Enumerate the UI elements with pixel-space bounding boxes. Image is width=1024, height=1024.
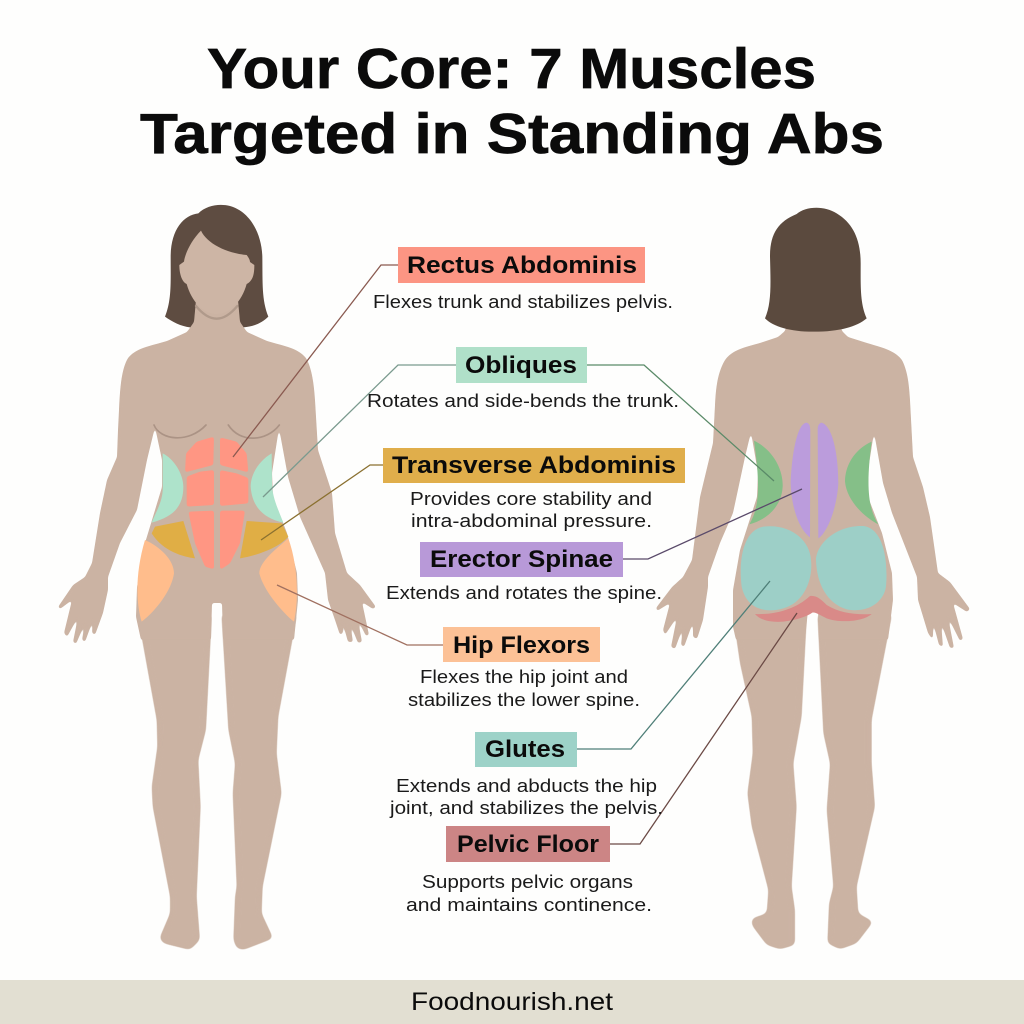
- face: [179, 231, 254, 314]
- hair: front: [165, 205, 268, 327]
- hair: back: [765, 208, 867, 332]
- label: pelvic floor: and maintains continence.: [406, 894, 652, 915]
- label: glutes: [389, 732, 663, 818]
- label: pelvic floor: Pelvic Floor: [457, 831, 599, 858]
- muscle: erector spinae: [791, 423, 838, 538]
- label: rectus abdominis: Rectus Abdominis: [407, 252, 637, 279]
- leader line: transverse abdominis: [261, 465, 383, 540]
- leader line: obliques right: [587, 365, 774, 481]
- title: [140, 37, 884, 166]
- footer: [0, 980, 1024, 1024]
- muscle: transverse abdominis: [152, 521, 288, 558]
- leader line: hip flexors: [277, 585, 443, 645]
- neck shadow: [196, 306, 237, 319]
- leader line: glutes: [577, 581, 770, 749]
- back body figure: [656, 208, 970, 949]
- title: Your Core: 7 Muscles: [207, 37, 816, 101]
- label: glutes: Glutes: [485, 736, 565, 763]
- label: transverse abdominis: Provides core stability and: [410, 488, 652, 509]
- label: erector spinae: [386, 542, 662, 603]
- skin: front legs: [137, 613, 297, 950]
- leader line: erector spinae: [623, 489, 802, 559]
- skin: front torso and arms: [58, 300, 376, 644]
- front body figure: [58, 205, 376, 950]
- label: transverse abdominis: [383, 448, 685, 531]
- leader line: pelvic floor: [610, 613, 797, 844]
- label: rectus abdominis: [373, 247, 673, 312]
- label: glutes: Extends and abducts the hip: [396, 775, 657, 796]
- muscle: obliques back: [749, 441, 878, 524]
- muscle: pelvic floor: [755, 596, 872, 622]
- muscle: obliques front: [152, 453, 283, 523]
- label: obliques: Rotates and side-bends the trunk.: [367, 390, 679, 411]
- label: glutes: joint, and stabilizes the pelvis.: [389, 797, 663, 818]
- label: hip flexors: Hip Flexors: [453, 632, 590, 659]
- muscle: hip flexors: [137, 538, 297, 622]
- label: obliques: [367, 347, 679, 411]
- label: hip flexors: [408, 627, 640, 710]
- label: pelvic floor: Supports pelvic organs: [422, 871, 633, 892]
- skin: back legs: [733, 613, 892, 949]
- leader line: obliques left: [263, 365, 456, 497]
- label: transverse abdominis: Transverse Abdominis: [392, 452, 676, 479]
- label: rectus abdominis: Flexes trunk and stabilizes pelvis.: [373, 291, 673, 312]
- muscle: rectus abdominis: [185, 437, 248, 570]
- title: Targeted in Standing Abs: [140, 102, 884, 166]
- leader line: rectus abdominis: [233, 265, 398, 457]
- label: erector spinae: Extends and rotates the spine.: [386, 582, 662, 603]
- label: erector spinae: Erector Spinae: [430, 546, 613, 573]
- skin: back torso and arms: [656, 323, 970, 649]
- footer: Foodnourish.net: [411, 988, 613, 1016]
- label: obliques: Obliques: [465, 352, 577, 379]
- muscle: glutes: [741, 526, 887, 610]
- chest contour lines: [154, 425, 279, 438]
- label: hip flexors: Flexes the hip joint and: [420, 666, 628, 687]
- label: pelvic floor: [406, 826, 652, 915]
- label: hip flexors: stabilizes the lower spine.: [408, 689, 640, 710]
- label: transverse abdominis: intra-abdominal pressure.: [411, 510, 652, 531]
